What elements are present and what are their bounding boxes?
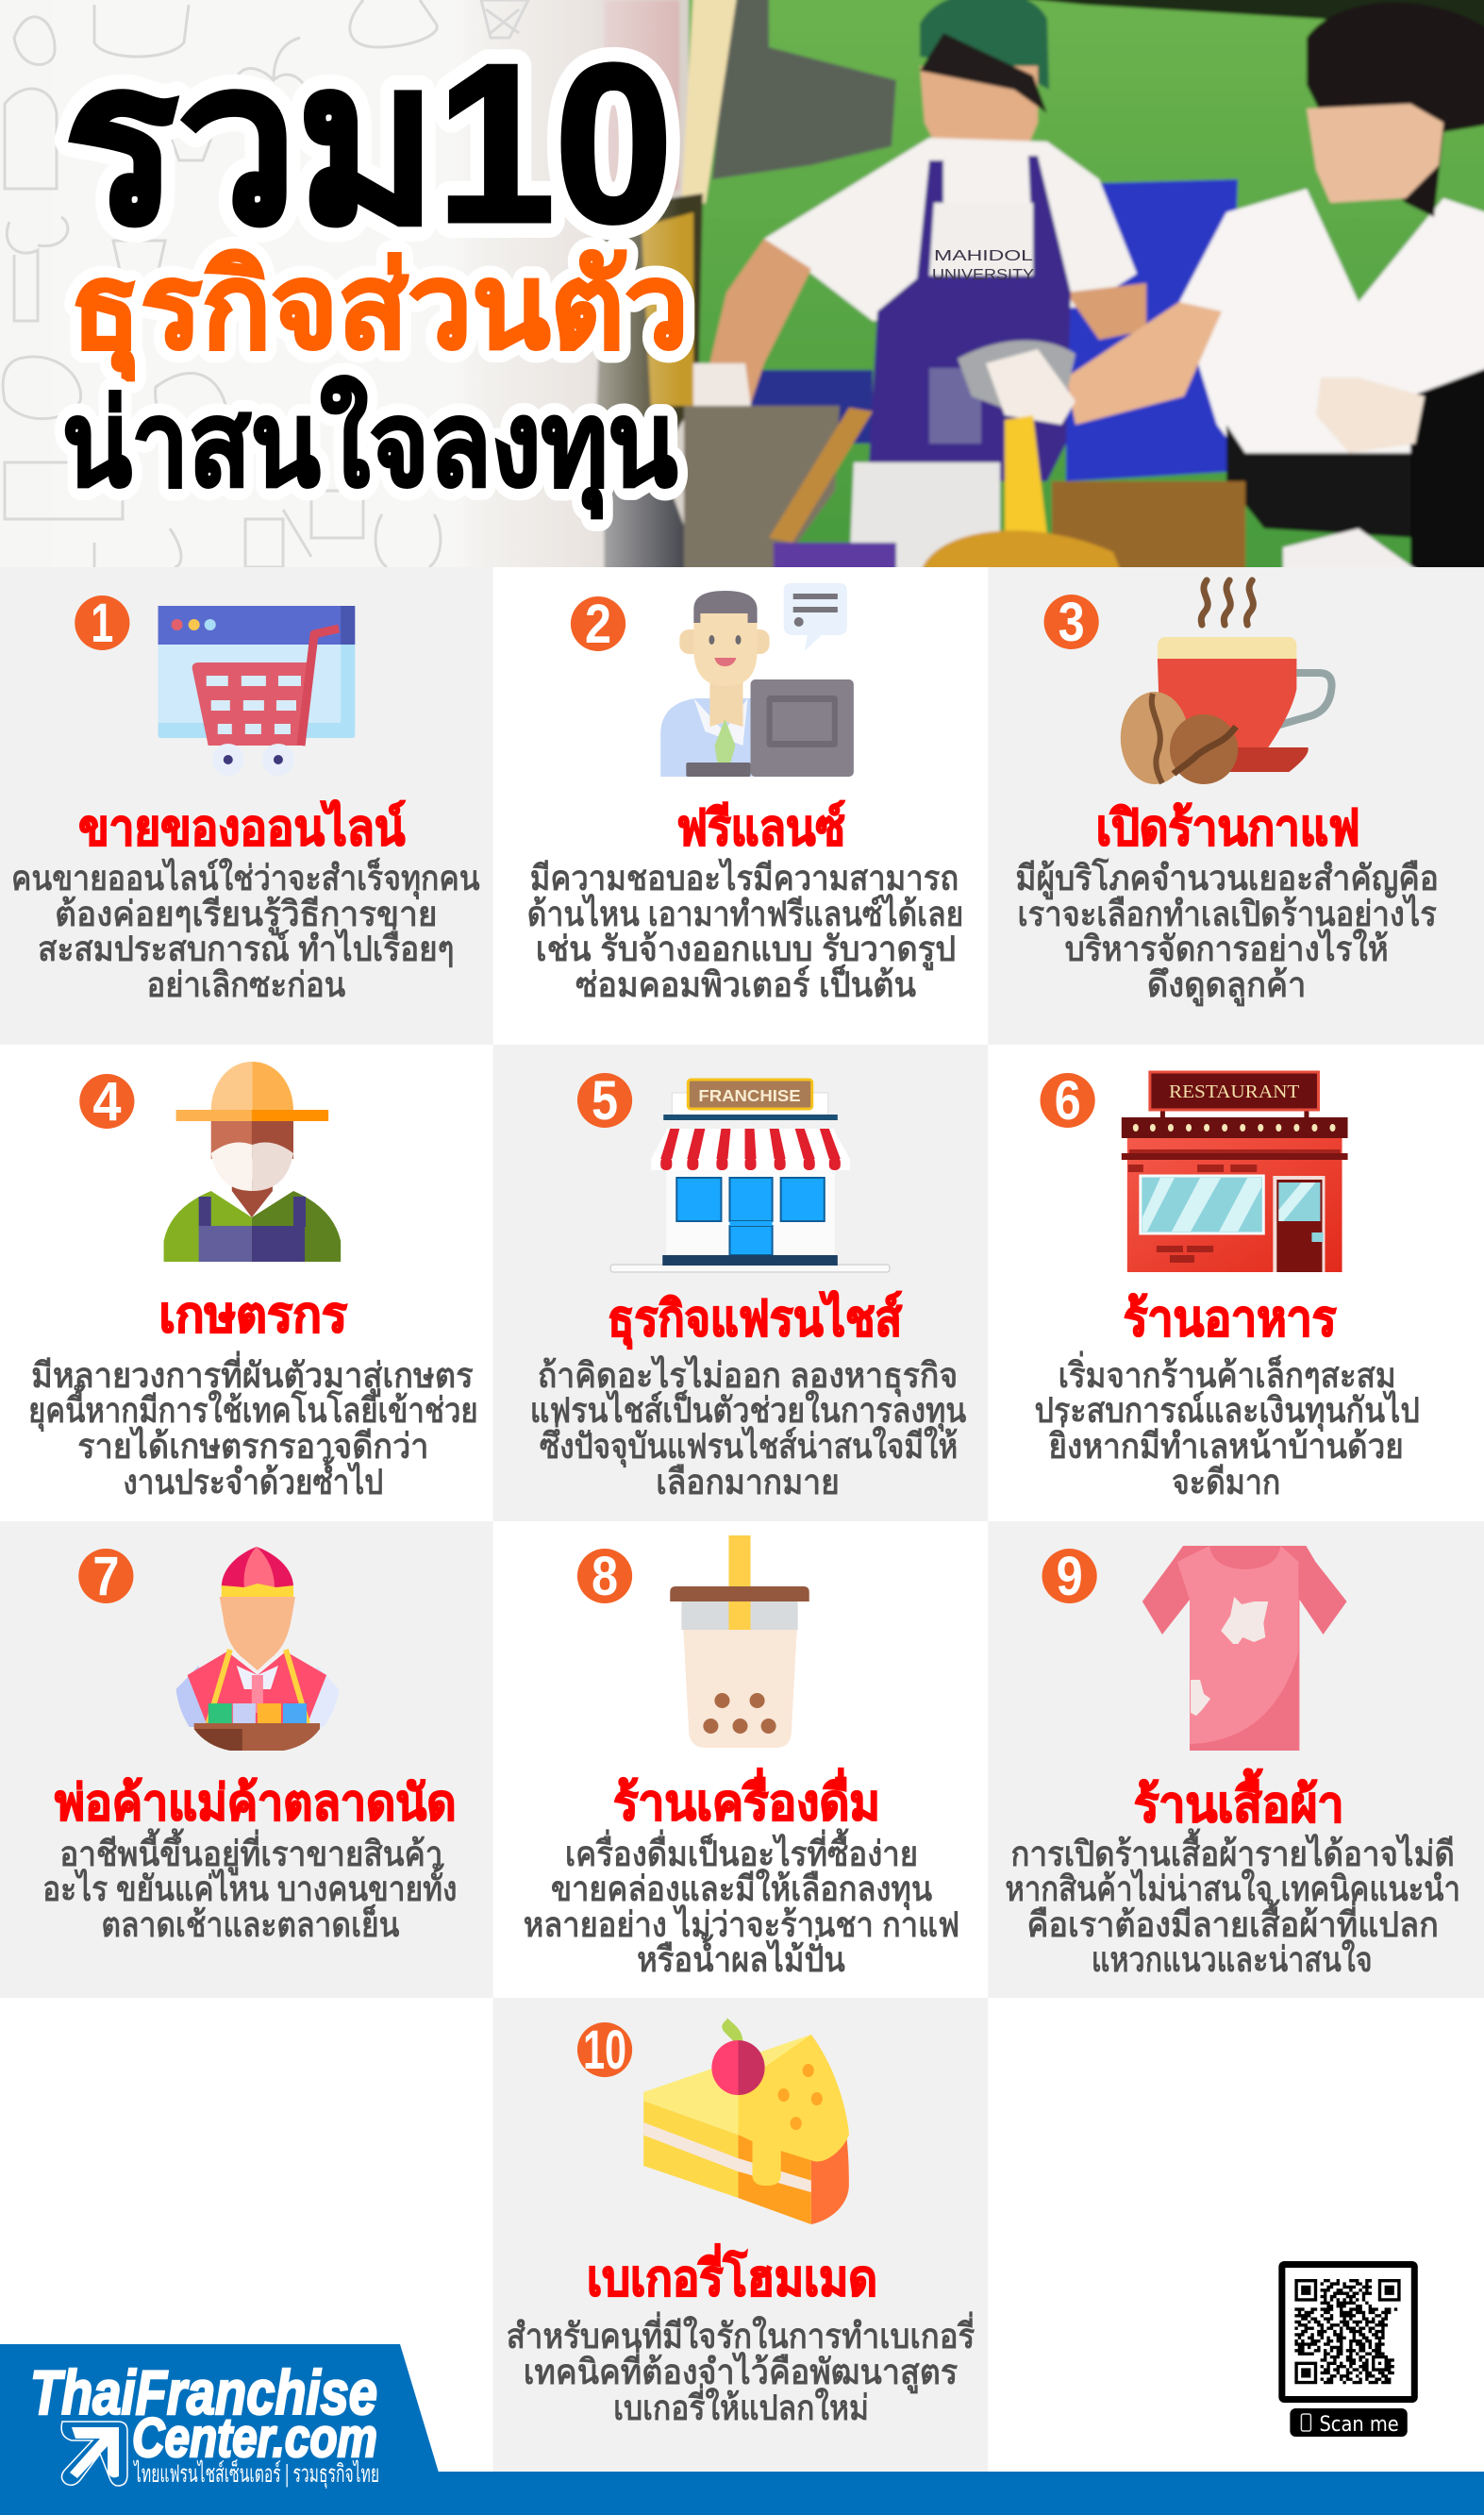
text block 5: แฟรนไชส์เป็นตัวช่วยในการลงทุน [530,1388,966,1432]
badge 6: 6 [1055,1070,1081,1132]
badge 6 [1041,1070,1095,1132]
badge 3: 3 [1059,592,1085,653]
text block 10 [507,2311,975,2427]
title line 3: น่าสนใจลงทุน [62,377,677,518]
badge 10: 10 [583,2020,626,2081]
left pale fade with food doodles [0,0,681,567]
scan me label [1290,2408,1408,2437]
scan me label: Scan me [1319,2413,1399,2437]
panel 3: coffee shop [988,567,1484,1045]
title line 2: ธุรกิจส่วนตัว [71,240,689,380]
shirt print text: UNIVERSITY [932,267,1034,283]
heading 6: ร้านอาหาร [1124,1292,1337,1347]
heading 5: ธุรกิจแฟรนไชส์ [608,1290,902,1350]
text block 4: รายได้เกษตรกรอาจดีกว่า [77,1426,428,1466]
heading 2: ฟรีแลนซ์ [676,800,845,856]
title line 2: ธุรกิจส่วนตัว [71,240,689,380]
heading 8: ร้านเครื่องดื่ม [613,1768,880,1831]
text block 3: มีผู้บริโภคจำนวนเยอะสำคัญคือ [1015,858,1439,899]
badge 9: 9 [1057,1546,1083,1607]
text block 8: เครื่องดื่มเป็นอะไรที่ซื้อง่าย [565,1828,918,1873]
text block 10: เบเกอรี่ให้แปลกใหม่ [613,2383,869,2427]
badge 2: 2 [585,594,611,655]
header: photo banner [0,0,1484,576]
QR code with frame [1278,2261,1418,2403]
icon: restaurant building: RESTAURANT [1169,1081,1299,1102]
text block 7: ตลาดเช้าและตลาดเย็น [101,1903,399,1944]
text block 1 [11,856,480,1004]
text block 5: เลือกมากมาย [656,1462,840,1501]
badge 7 [78,1546,133,1607]
text block 3: ดึงดูดลูกค้า [1147,964,1306,1006]
title line 1: รวม10 [64,19,673,269]
text block 4: ยุคนี้หากมีการใช้เทคโนโลยีเข้าช่วย [28,1384,478,1432]
icon: market vendor [176,1547,339,1751]
heading 3: เปิดร้านกาแฟ [1096,801,1360,856]
title line 3: น่าสนใจลงทุน [62,377,677,518]
title line 1: รวม10 [64,19,673,269]
text block 8: ขายคล่องและมีให้เลือกลงทุน [551,1869,932,1910]
panel 2: freelance [527,583,963,1004]
icon: online shopping cart [158,606,355,776]
text block 6: ประสบการณ์และเงินทุนกันไป [1034,1390,1420,1432]
logo arrow [61,2422,127,2486]
text block 2: เช่น รับจ้างออกแบบ รับวาดรูป [536,929,956,970]
text block 6: จะดีมาก [1172,1462,1280,1501]
icon: bubble tea [670,1535,809,1748]
heading 1: ขายของออนไลน์ [78,799,406,856]
woman [1179,189,1484,462]
shirt print text [933,250,1034,279]
panel 9: clothing shop [988,1521,1484,1998]
badge 7: 7 [92,1546,119,1607]
text block 5 [530,1355,966,1501]
panel 8: drink shop [524,1535,959,1979]
text block 3 [1015,858,1439,1006]
text block 8 [524,1828,959,1979]
text block 9 [1005,1828,1460,1979]
icon: franchise store: FRANCHISE [698,1086,801,1105]
text block 10: เทคนิคที่ต้องจำไว้คือพัฒนาสูตร [524,2347,958,2393]
text block 2: ซ่อมคอมพิวเตอร์ เป็นต้น [575,963,916,1004]
heading 9: ร้านเสื้อผ้า [1134,1769,1344,1833]
panel 10: homemade bakery [493,1998,988,2473]
shirt print text: MAHIDOL [934,248,1033,264]
text block 4: งานประจำด้วยซ้ำไป [123,1456,383,1501]
icon: freelancer at computer [660,583,854,777]
text block 2: ด้านไหน เอามาทำฟรีแลนซ์ได้เลย [527,894,963,933]
text block 5: ถ้าคิดอะไรไม่ออก ลองหาธุรกิจ [538,1355,958,1397]
text block 8: หรือน้ำผลไม้ปั่น [637,1934,845,1979]
text block 9: คือเราต้องมีลายเสื้อผ้าที่แปลก [1026,1899,1439,1944]
logo name line 1: ThaiFranchise [30,2357,377,2427]
heading 10: เบเกอรี่โฮมเมด [587,2243,877,2306]
badge 3 [1044,592,1099,653]
heading 7: พ่อค้าแม่ค้าตลาดนัด [55,1776,457,1831]
table and food [684,406,840,576]
icon: stained t-shirt [1142,1546,1347,1751]
badge 4 [79,1071,134,1132]
text block 7 [42,1828,458,1944]
footer bar [0,2472,1484,2515]
heading 4: เกษตรกร [159,1288,347,1343]
badge 1: 1 [91,593,113,654]
text block 1: คนขายออนไลน์ใช่ว่าจะสำเร็จทุกคน [11,856,480,899]
text block 1: อย่าเลิกซะก่อน [146,964,345,1004]
icon: farmer [164,1062,341,1262]
text block 2 [527,858,963,1004]
blue crate [1066,179,1238,481]
panel 1: online selling [0,567,493,1045]
badge 2 [571,594,625,655]
icon: franchise store [610,1080,890,1272]
text block 7: อาชีพนี้ขึ้นอยู่ที่เราขายสินค้า [59,1828,442,1875]
panel 6: restaurant [1034,1070,1420,1501]
text block 4 [28,1350,478,1501]
icon: coffee cup and beans [1121,580,1332,784]
logo block [0,2344,439,2515]
text block 5: ซึ่งปัจจุบันแฟรนไชส์น่าสนใจมีให้ [540,1421,958,1467]
icon: cake slice [643,2018,849,2224]
text block 8: หลายอย่าง ไม่ว่าจะร้านชา กาแฟ [524,1904,959,1944]
text block 6: เริ่มจากร้านค้าเล็กๆสะสม [1059,1350,1396,1395]
man [920,0,1049,90]
text block 10: สำหรับคนที่มีใจรักในการทำเบเกอรี่ [507,2311,975,2356]
panel 7: market vendor [0,1521,493,1998]
text block 3: เราจะเลือกทำเลเปิดร้านอย่างไร [1017,894,1437,933]
text block 1: ต้องค่อยๆเรียนรู้วิธีการขาย [55,894,437,935]
photo: market stall vendors [462,0,1484,576]
logo tagline: ไทยแฟรนไชส์เซ็นเตอร์ | รวมธุรกิจไทย [133,2458,379,2489]
text block 6 [1034,1350,1420,1501]
text block 7: อะไร ขยันแค่ไหน บางคนขายทั้ง [42,1863,458,1908]
text block 1: สะสมประสบการณ์ ทำไปเรื่อยๆ [38,924,455,968]
panel 5: franchise [493,1045,988,1521]
text block 9: แหวกแนวและน่าสนใจ [1092,1939,1373,1979]
badge 5 [577,1070,632,1132]
icon: restaurant building [1122,1072,1348,1272]
text block 3: บริหารจัดการอย่างไรให้ [1065,929,1389,968]
text block 6: ยิ่งหากมีทำเลหน้าบ้านด้วย [1049,1421,1404,1466]
badge 4: 4 [92,1071,121,1132]
badge 8: 8 [592,1546,618,1607]
text block 2: มีความชอบอะไรมีความสามารถ [530,858,959,897]
badge 9 [1042,1546,1097,1607]
text block 4: มีหลายวงการที่ผันตัวมาสู่เกษตร [31,1350,474,1397]
badge 8 [577,1546,632,1607]
panel 4: farmer [28,1062,478,1501]
badge 5: 5 [592,1070,618,1132]
badge 1 [75,593,129,654]
logo name line 2: Center.com [132,2407,377,2469]
